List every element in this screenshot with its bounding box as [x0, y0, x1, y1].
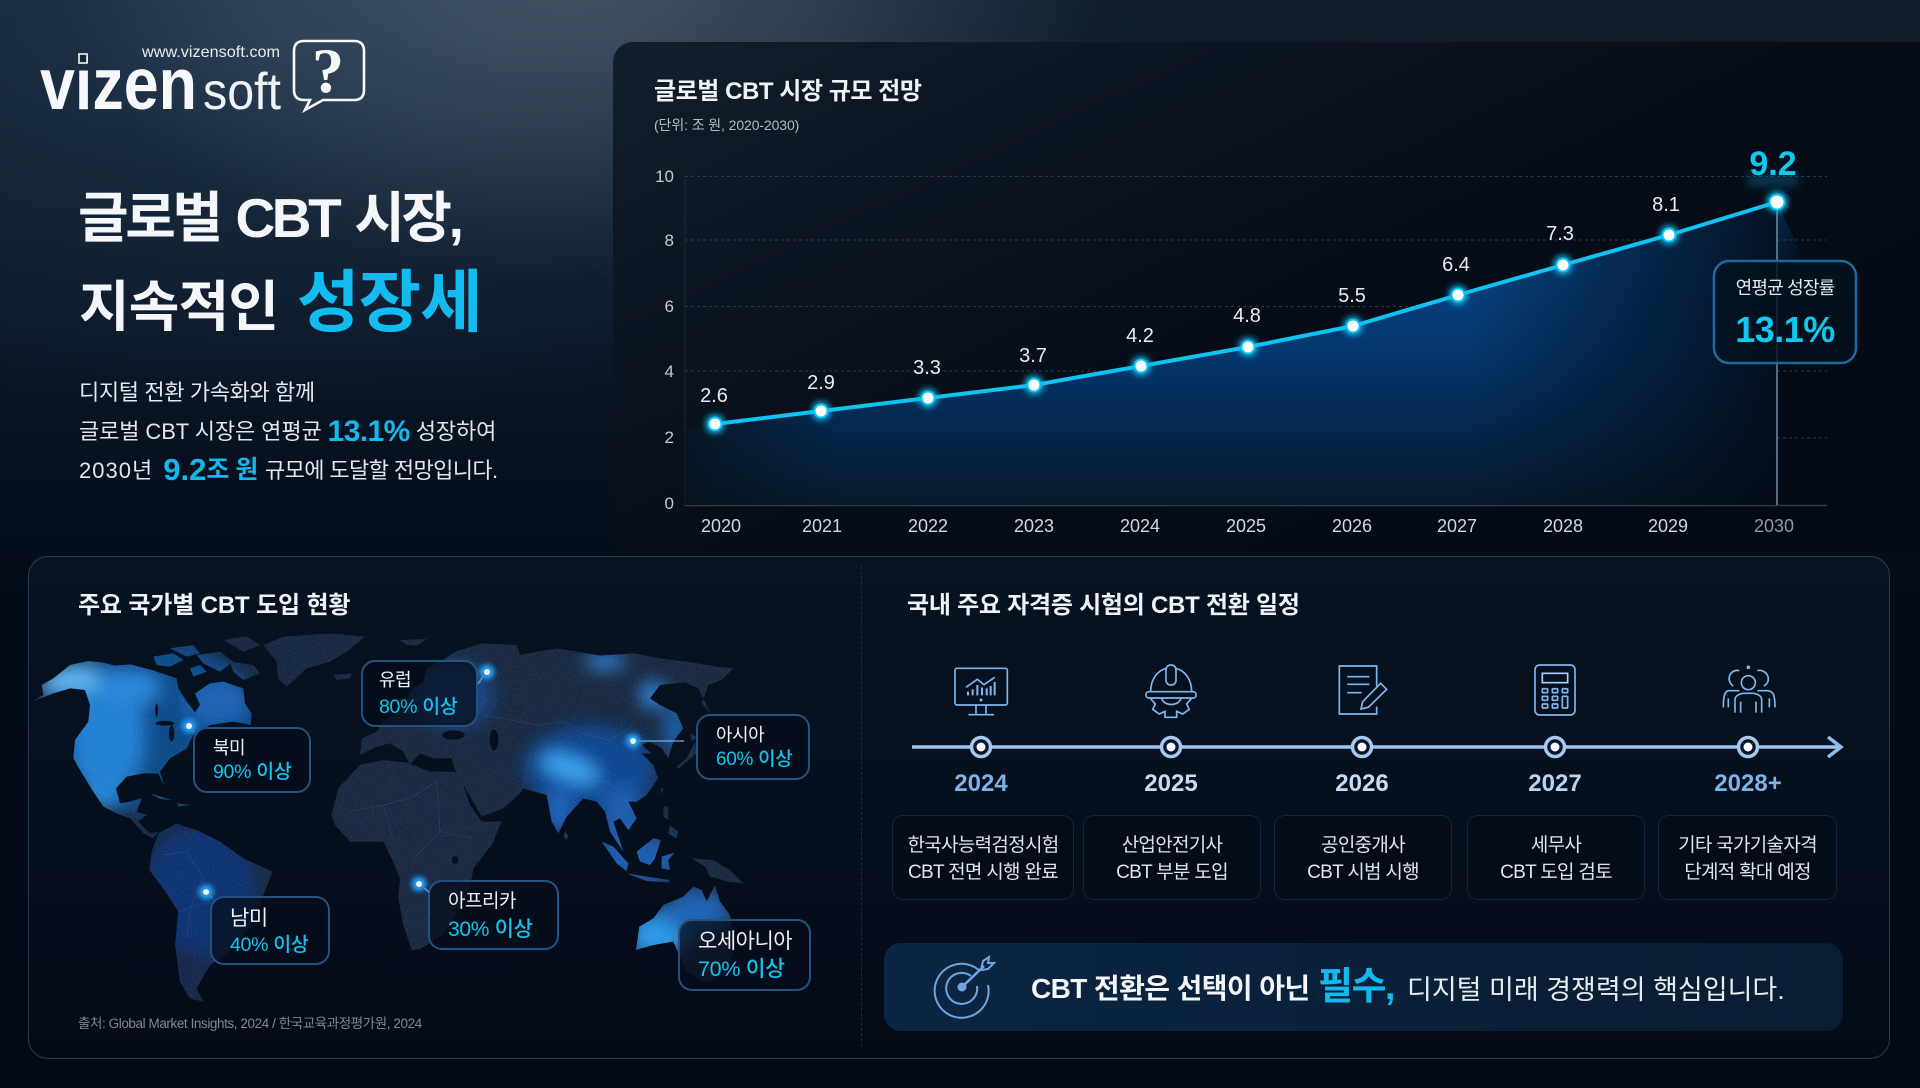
card: 2025 — [1083, 815, 1261, 900]
intro paragraph: 2030년 9.2조 원 규모에 도달할 전망입니다. — [79, 452, 498, 487]
map heading: 주요 국가별 CBT 도입 현황 — [78, 592, 350, 619]
chart heading: 글로벌 CBT 시장 규모 전망 — [654, 78, 922, 105]
year: 2025: 2025 — [1144, 770, 1198, 797]
intro paragraph: 글로벌 CBT 시장은 연평균 13.1% 성장하여 — [79, 415, 496, 448]
card: 2028+: 단계적 확대 예정 — [1684, 862, 1811, 883]
message text: CBT 전환은 선택이 아닌 — [1031, 973, 1310, 1004]
title: 성장세 — [297, 265, 482, 341]
x axis labels: 2027 — [1437, 516, 1477, 536]
map callout: oceania — [678, 919, 811, 991]
icon: document and pencil — [1338, 665, 1388, 715]
x axis labels: 2024 — [1120, 516, 1160, 536]
value labels: 3.7 — [1019, 345, 1047, 367]
card: 2025: CBT 부분 도입 — [1116, 862, 1228, 883]
message continued: 디지털 미래 경쟁력의 핵심입니다. — [1407, 975, 1785, 1005]
year: 2024: 2024 — [954, 770, 1008, 797]
map callout: oceania: 오세아니아 — [698, 930, 792, 953]
icon: target and arrow — [934, 955, 996, 1019]
icon: safety helmet and gear — [1145, 664, 1197, 718]
y axis labels: 8 — [665, 231, 674, 250]
emphasis: 필수: 필수, — [1318, 966, 1394, 1008]
callout: CAGR — [1714, 261, 1856, 363]
x axis labels: 2022 — [908, 516, 948, 536]
title: 글로벌 CBT 시장, — [78, 187, 460, 249]
timeline axis — [912, 736, 1844, 758]
map callout: asia — [696, 714, 810, 780]
value labels: 4.2 — [1126, 325, 1154, 347]
panel: bottom container — [28, 556, 1890, 1059]
callout: CAGR: 연평균 성장률 — [1736, 278, 1835, 298]
title: 지속적인 — [79, 276, 278, 338]
map callout: north america: 북미 — [213, 738, 245, 758]
x axis labels: 2020 — [701, 516, 741, 536]
card: 2028+: 기타 국가기술자격 — [1678, 835, 1817, 856]
card: 2026: CBT 시범 시행 — [1307, 862, 1419, 883]
card: 2024: CBT 전면 시행 완료 — [908, 862, 1058, 883]
x axis labels: 2025 — [1226, 516, 1266, 536]
value labels: 5.5 — [1338, 285, 1366, 307]
year: 2027: 2027 — [1528, 770, 1582, 797]
x axis labels — [701, 516, 1794, 536]
schedule heading: 국내 주요 자격증 시험의 CBT 전환 일정 — [907, 592, 1300, 619]
divider — [861, 566, 862, 1046]
timeline nodes — [972, 738, 1758, 756]
value labels: 6.4 — [1442, 254, 1470, 276]
icon: people group — [1722, 666, 1776, 713]
value labels: 2.9 — [807, 372, 835, 394]
land speckle — [38, 634, 743, 1002]
icon: monitor chart — [954, 668, 1008, 716]
map callout: south america: 남미 — [230, 907, 268, 930]
value labels: 2.6 — [700, 385, 728, 407]
map callout: africa: 아프리카 — [448, 891, 516, 912]
map callout: south america: 40% 이상 — [230, 934, 309, 956]
value labels: 8.1 — [1652, 194, 1680, 216]
card: 2026: 공인중개사 — [1321, 835, 1405, 856]
map callout: europe — [361, 660, 478, 727]
line chart: market size 2020-2030 — [655, 145, 1858, 536]
map callout: oceania: 70% 이상 — [698, 957, 785, 981]
north america glow — [34, 645, 312, 1000]
year: 2028+: 2028+ — [1714, 770, 1782, 797]
map callout: africa: 30% 이상 — [448, 918, 533, 941]
logo: vizensoft: www.vizensoft.com — [141, 44, 280, 61]
logo: vizensoft: ? — [312, 35, 344, 106]
y axis labels: 0 — [665, 494, 674, 513]
reference line 2030 — [1776, 202, 1778, 505]
chart unit note: (단위: 조 원, 2020-2030) — [654, 117, 799, 133]
map pins — [178, 661, 684, 902]
x axis labels: 2026 — [1332, 516, 1372, 536]
map callout: south america — [210, 896, 330, 965]
trend line — [715, 202, 1777, 424]
map callout: europe: 80% 이상 — [379, 696, 458, 718]
value labels: 3.3 — [913, 357, 941, 379]
y axis labels: 10 — [655, 167, 674, 186]
x axis labels: 2021 — [802, 516, 842, 536]
data points — [705, 191, 1788, 434]
x axis labels: 2030 — [1754, 516, 1794, 536]
x axis labels: 2029 — [1648, 516, 1688, 536]
country borders — [83, 666, 633, 938]
logo: vizensoft: vizen — [40, 44, 197, 125]
panel: market forecast chart — [613, 42, 1920, 552]
x axis labels: 2023 — [1014, 516, 1054, 536]
icon: calculator — [1534, 664, 1576, 716]
value labels — [700, 194, 1680, 407]
callout: key message — [884, 943, 1843, 1031]
peak value 9.2: 9.2 — [1749, 145, 1797, 183]
y axis labels: 6 — [665, 297, 674, 316]
card: 2025: 산업안전기사 — [1122, 835, 1222, 856]
map callout: north america: 90% 이상 — [213, 761, 292, 783]
logo: vizensoft: soft — [203, 63, 282, 121]
world map — [34, 634, 743, 1002]
map callout: africa — [428, 880, 559, 950]
card: 2024 — [892, 815, 1074, 900]
year: 2026: 2026 — [1335, 770, 1389, 797]
x axis labels: 2028 — [1543, 516, 1583, 536]
intro paragraph: 디지털 전환 가속화와 함께 — [79, 380, 315, 405]
source note: 출처: Global Market Insights, 2024 / 한국교육과정평가원, 2024 — [78, 1016, 422, 1031]
callout: CAGR: 13.1% — [1735, 309, 1835, 350]
map callout: north america — [193, 727, 311, 793]
y axis labels: 4 — [665, 362, 674, 381]
card: 2024: 한국사능력검정시험 — [907, 835, 1059, 856]
eurasia and oceania glow — [413, 654, 730, 958]
y axis labels: 2 — [665, 428, 674, 447]
map callout: europe: 유럽 — [379, 670, 411, 690]
y axis labels — [655, 167, 674, 513]
card: 2028+ — [1658, 815, 1837, 900]
card: 2027 — [1467, 815, 1645, 900]
area under the line — [685, 202, 1805, 505]
map callout: asia: 60% 이상 — [716, 749, 792, 770]
card: 2027: CBT 도입 검토 — [1500, 862, 1612, 883]
value labels: 7.3 — [1546, 223, 1574, 245]
card: 2027: 세무사 — [1531, 835, 1581, 856]
value labels: 4.8 — [1233, 305, 1261, 327]
logo: vizensoft — [40, 35, 366, 125]
inland seas — [155, 703, 498, 864]
card: 2026 — [1274, 815, 1452, 900]
map callout: asia: 아시아 — [716, 725, 764, 745]
arrow head — [1828, 737, 1841, 757]
title — [78, 187, 482, 341]
intro paragraph — [79, 380, 498, 487]
